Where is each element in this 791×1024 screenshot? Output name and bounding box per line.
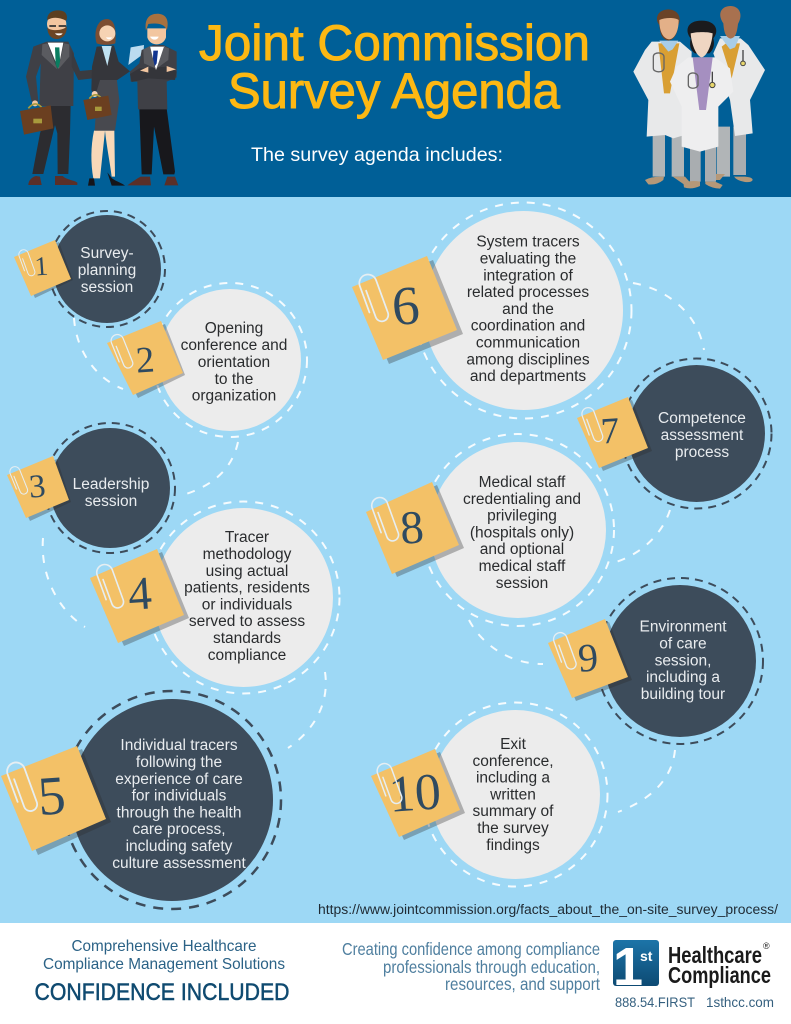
step 5 circle bbox=[71, 699, 273, 901]
company logo bbox=[613, 937, 771, 997]
footer tagline: CONFIDENCE INCLUDED bbox=[34, 979, 290, 1006]
step 10 text: the survey bbox=[477, 820, 549, 837]
step 1 text: session bbox=[81, 279, 133, 296]
logo square bbox=[613, 940, 659, 986]
step 7 bbox=[577, 358, 772, 508]
step 9 note shadow bbox=[552, 622, 632, 701]
step 4 text: using actual bbox=[206, 563, 288, 580]
step 7 paperclip bbox=[580, 406, 604, 444]
contact details: 1sthcc.com bbox=[706, 994, 774, 1010]
step 4 bbox=[90, 502, 340, 694]
step 5 text: experience of care bbox=[115, 771, 243, 788]
step 10 text: summary of bbox=[473, 803, 554, 820]
man with tablet bbox=[127, 14, 178, 185]
step 2 note shadow bbox=[112, 324, 185, 398]
step 7 text: assessment bbox=[661, 427, 744, 444]
step 5 ring bbox=[63, 691, 281, 909]
step 9 text: Environment bbox=[639, 619, 727, 636]
step 2 note bbox=[107, 321, 183, 395]
step 1 number: 1 bbox=[34, 251, 49, 281]
step 10 note bbox=[371, 749, 460, 837]
step 2 text: Opening bbox=[205, 320, 263, 337]
step 10 bbox=[371, 702, 608, 886]
connector: 3 to 4 bbox=[43, 538, 85, 627]
connector: 1 to 2 bbox=[74, 318, 123, 389]
step 5 text: care process, bbox=[132, 821, 226, 838]
step 4 number: 4 bbox=[126, 567, 153, 621]
step 3 note shadow bbox=[11, 459, 71, 521]
step 1 note shadow bbox=[18, 242, 73, 298]
step 5 note shadow bbox=[6, 749, 111, 855]
footer description: resources, and support bbox=[445, 974, 600, 994]
step 6 text: among disciplines bbox=[466, 351, 590, 368]
subtitle: The survey agenda includes: bbox=[251, 144, 503, 166]
step 8 text: credentialing and bbox=[463, 491, 581, 508]
header band bbox=[0, 0, 791, 197]
step 8 number: 8 bbox=[398, 501, 425, 555]
step 6 circle bbox=[424, 211, 623, 410]
step 1 note bbox=[14, 240, 71, 296]
title: Survey Agenda bbox=[228, 63, 560, 119]
step 10 note shadow bbox=[376, 752, 465, 840]
step 9 text: session, bbox=[655, 652, 711, 669]
contact details bbox=[615, 994, 774, 1010]
step 8 text: privileging bbox=[487, 508, 557, 525]
step 4 ring bbox=[148, 502, 340, 694]
step 1 bbox=[14, 211, 165, 327]
illustration: medical team bbox=[633, 6, 765, 189]
step 8 text: session bbox=[496, 575, 548, 592]
step 2 text: to the bbox=[215, 371, 253, 388]
step 6 text: evaluating the bbox=[480, 250, 576, 268]
step 7 number: 7 bbox=[600, 410, 621, 453]
step 1 text: Survey- bbox=[80, 245, 134, 262]
step 2 text: orientation bbox=[198, 354, 270, 371]
step 4 text: patients, residents bbox=[184, 580, 310, 596]
step 3 paperclip bbox=[8, 465, 29, 496]
step 9 number: 9 bbox=[577, 634, 600, 681]
step 6 note shadow bbox=[358, 260, 463, 364]
connector: 6 to 7 bbox=[633, 283, 704, 350]
step 8 ring bbox=[422, 434, 614, 626]
connector: 8 to 9 bbox=[469, 620, 543, 664]
step 3 bbox=[7, 423, 175, 553]
step 7 text: process bbox=[675, 444, 729, 461]
step 4 text: served to assess bbox=[189, 613, 305, 630]
connector: 7 to 8 bbox=[613, 510, 670, 563]
step 9 circle bbox=[604, 585, 756, 737]
step 10 ring bbox=[424, 702, 608, 886]
title bbox=[199, 15, 590, 119]
step 8 text: (hospitals only) bbox=[470, 524, 574, 541]
logo wordmark: Healthcare bbox=[668, 942, 762, 968]
step 8 text: Medical staff bbox=[479, 474, 566, 491]
step 4 circle bbox=[154, 508, 333, 687]
step 6 text: related processes bbox=[467, 284, 589, 301]
illustration: business people bbox=[20, 10, 178, 186]
step 5 paperclip bbox=[5, 760, 39, 814]
step 4 text: compliance bbox=[208, 647, 286, 664]
step 10 number: 10 bbox=[387, 763, 443, 824]
step 10 text: Exit bbox=[500, 736, 527, 753]
step 10 text: findings bbox=[486, 837, 540, 854]
step 8 note shadow bbox=[371, 485, 464, 577]
step 2 bbox=[107, 283, 307, 437]
step 3 ring bbox=[45, 423, 175, 553]
step 4 paperclip bbox=[94, 562, 125, 611]
footer description: Creating confidence among compliance bbox=[342, 939, 600, 959]
step 5 number: 5 bbox=[36, 764, 68, 827]
step 6 text: and departments bbox=[470, 368, 586, 385]
step 10 text: written bbox=[489, 786, 536, 803]
step 10 text: including a bbox=[476, 770, 550, 787]
step 5 text: Individual tracers bbox=[120, 737, 238, 754]
step 6 number: 6 bbox=[390, 274, 422, 337]
step 10 text: conference, bbox=[472, 753, 554, 770]
step 9 text: of care bbox=[659, 636, 707, 652]
step 5 text: for individuals bbox=[132, 788, 227, 804]
step 1 paperclip bbox=[17, 248, 36, 278]
connector: 4 to 5 bbox=[288, 672, 326, 748]
title: Joint Commission bbox=[199, 15, 590, 71]
step 9 paperclip bbox=[552, 631, 578, 672]
step 9 note bbox=[548, 619, 628, 698]
step 1 text: planning bbox=[78, 262, 136, 279]
connector: 2 to 3 bbox=[183, 442, 238, 495]
step 6 text: and the bbox=[502, 301, 554, 318]
contact details: 888.54.FIRST bbox=[615, 994, 695, 1010]
step 8 paperclip bbox=[369, 495, 400, 544]
step 7 ring bbox=[622, 358, 772, 508]
step 2 text: organization bbox=[192, 388, 276, 404]
logo superscript: st bbox=[640, 948, 653, 964]
step 10 paperclip bbox=[375, 761, 403, 806]
step 2 number: 2 bbox=[135, 339, 156, 382]
step 4 note bbox=[90, 549, 184, 643]
doctor front bbox=[670, 21, 733, 189]
step 5 text: through the health bbox=[117, 804, 241, 822]
step 6 text: communication bbox=[476, 334, 580, 352]
step 4 text: standards bbox=[213, 630, 281, 647]
step 5 text: following the bbox=[136, 754, 222, 771]
logo numeral: 1 bbox=[613, 937, 643, 997]
step 7 text: Competence bbox=[658, 410, 746, 427]
step 1 circle bbox=[53, 215, 161, 323]
step 2 circle bbox=[159, 289, 301, 431]
source url: https://www.jointcommission.org/facts_about_the_on-site_survey_process/ bbox=[318, 902, 778, 917]
doctor back right bbox=[713, 6, 765, 182]
step 8 text: medical staff bbox=[479, 558, 566, 575]
footer tagline: Comprehensive Healthcare bbox=[72, 938, 257, 955]
step 5 note bbox=[1, 746, 106, 851]
step 6 paperclip bbox=[357, 272, 390, 325]
footer description: professionals through education, bbox=[383, 957, 600, 977]
man with beard bbox=[20, 10, 110, 185]
step 5 text: culture assessment bbox=[112, 855, 246, 872]
step 9 bbox=[548, 578, 763, 744]
step 6 ring bbox=[416, 202, 632, 418]
step 2 paperclip bbox=[109, 333, 134, 371]
footer description bbox=[342, 939, 600, 994]
step 3 number: 3 bbox=[28, 468, 47, 506]
step 3 circle bbox=[50, 428, 170, 548]
woman bbox=[83, 19, 130, 186]
doctor back left bbox=[633, 9, 692, 184]
step 8 text: and optional bbox=[480, 541, 564, 558]
step 9 ring bbox=[597, 578, 763, 744]
footer tagline bbox=[34, 938, 290, 1006]
step 9 text: including a bbox=[646, 669, 720, 686]
step 3 text: session bbox=[85, 493, 137, 510]
step 8 note bbox=[366, 482, 459, 574]
step 6 text: coordination and bbox=[471, 318, 585, 335]
step 6 text: System tracers bbox=[476, 234, 580, 251]
step 5 bbox=[1, 691, 281, 909]
step 7 note shadow bbox=[581, 400, 652, 471]
step 2 text: conference and bbox=[181, 337, 287, 354]
step 6 note bbox=[352, 256, 457, 360]
step 7 circle bbox=[628, 365, 765, 502]
step 7 note bbox=[577, 397, 648, 468]
step 4 text: or individuals bbox=[202, 596, 292, 614]
step 9 text: building tour bbox=[641, 686, 725, 703]
step 6 text: integration of bbox=[483, 267, 573, 284]
connector: 9 to 10 bbox=[618, 750, 675, 812]
step 2 ring bbox=[153, 283, 307, 437]
step 6 bbox=[352, 202, 632, 418]
step 8 bbox=[366, 434, 614, 626]
step 3 note bbox=[7, 456, 69, 518]
step 4 text: Tracer bbox=[225, 529, 269, 546]
step 8 circle bbox=[430, 442, 606, 618]
step 4 text: methodology bbox=[203, 546, 292, 563]
step 4 note shadow bbox=[95, 552, 189, 646]
step 1 ring bbox=[49, 211, 165, 327]
footer tagline: Compliance Management Solutions bbox=[43, 956, 285, 973]
step 10 circle bbox=[431, 710, 600, 879]
step 5 text: including safety bbox=[126, 838, 233, 855]
footer band bbox=[0, 923, 791, 1024]
step 3 text: Leadership bbox=[73, 476, 149, 493]
company logo: ® bbox=[763, 941, 770, 951]
